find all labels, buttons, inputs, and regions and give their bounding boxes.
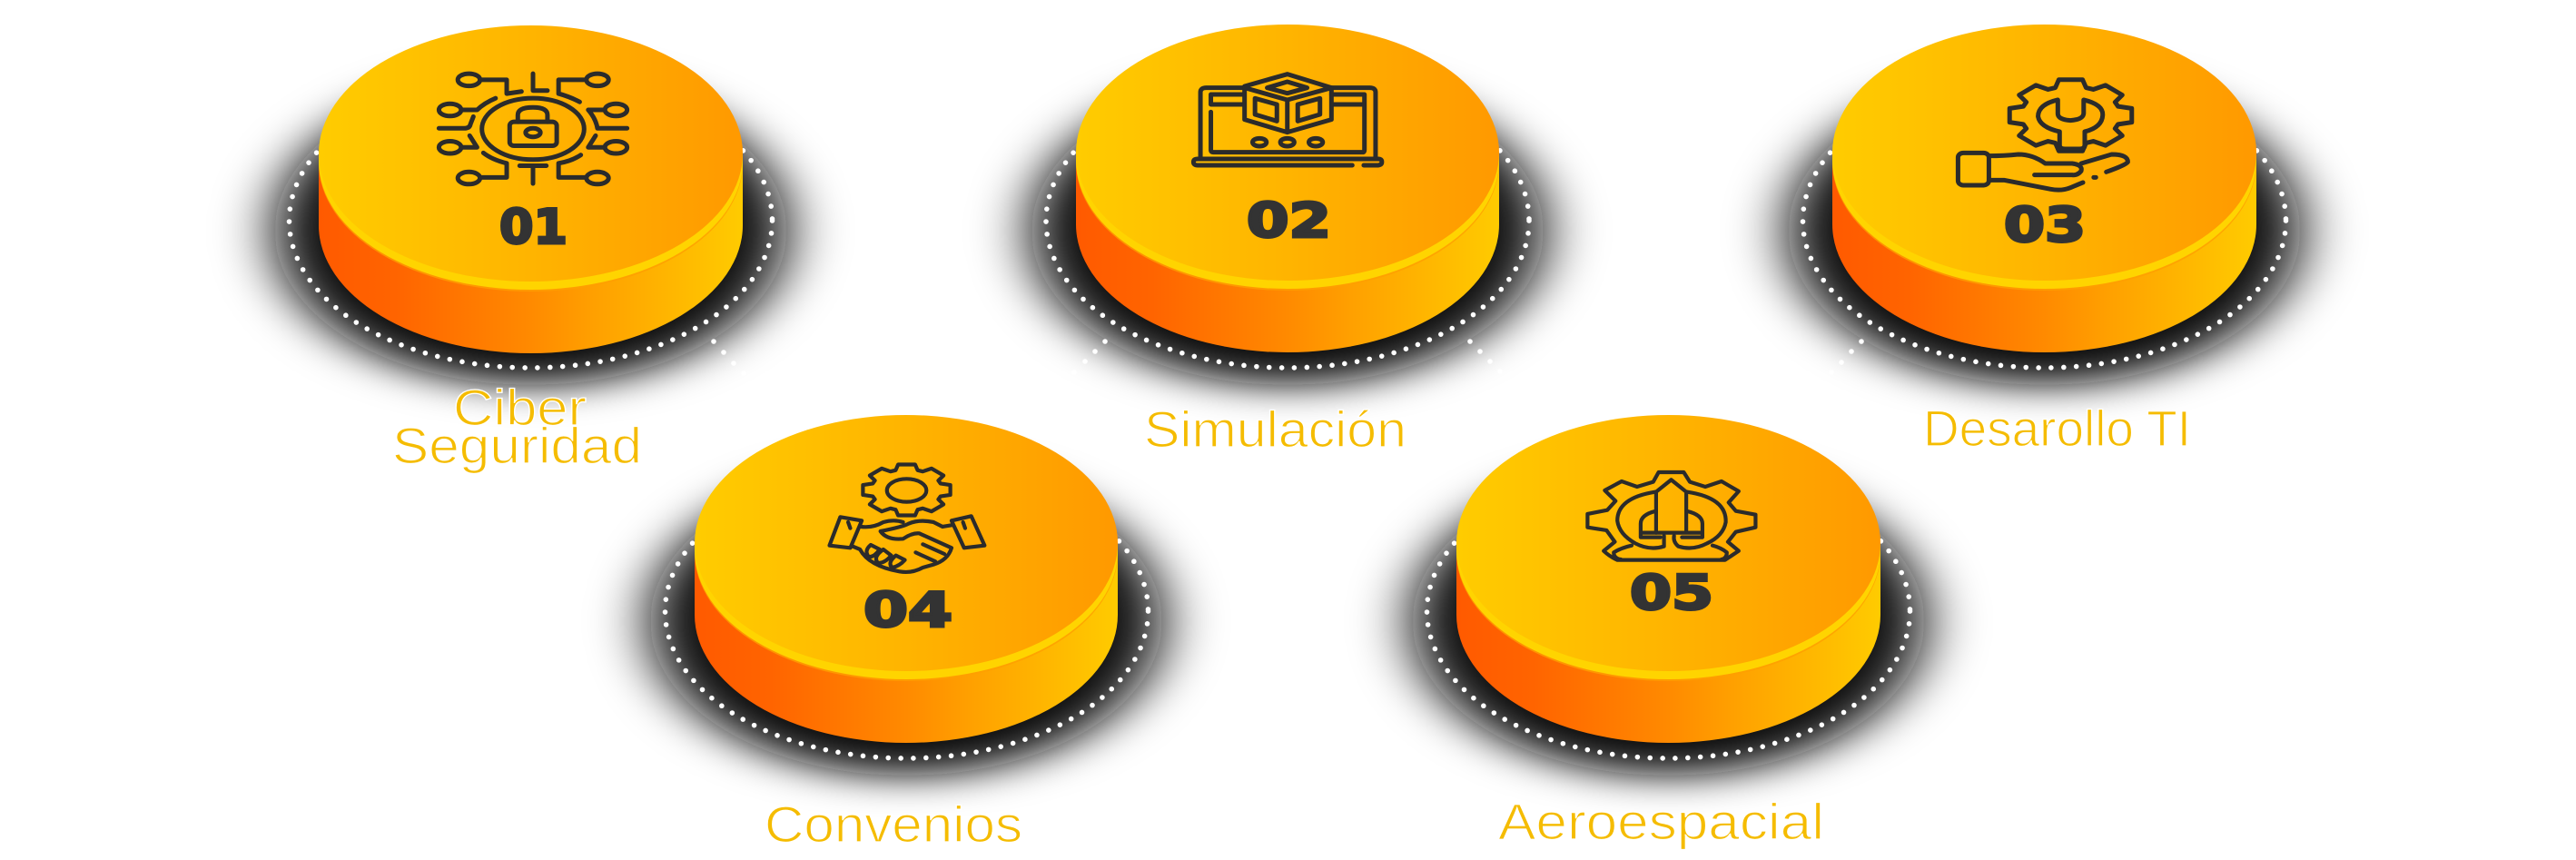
icon: circuit lock	[439, 74, 627, 184]
disk rim 04	[695, 423, 1118, 681]
panel: disk 01 Ciber Seguridad	[274, 25, 786, 385]
label: Desarollo TI: Desarollo TI	[1923, 400, 2191, 457]
disk side 03	[1832, 153, 2256, 352]
disk side 02	[1076, 153, 1499, 352]
number 05: 05	[1630, 566, 1713, 621]
shadow 05	[1413, 467, 1925, 776]
label line: Ciber: Ciber	[453, 379, 587, 436]
disk rim 01	[319, 34, 743, 292]
label: Ciber Seguridad	[392, 379, 642, 474]
disk top 02	[1076, 25, 1499, 281]
extra dots 03	[1829, 339, 1864, 375]
panel: disk 02 Simulación	[1031, 25, 1544, 385]
icon: gear with rocket	[1587, 472, 1755, 560]
number 02: 02	[1247, 193, 1331, 249]
label: Aeroespacial: Aeroespacial	[1498, 793, 1824, 850]
icon: handshake with gear	[830, 465, 984, 572]
disk side 05	[1456, 543, 1880, 743]
dotted ring 05	[1427, 464, 1910, 758]
dotted ring 03	[1803, 74, 2286, 368]
number 04: 04	[864, 583, 952, 638]
disk rim 03	[1832, 33, 2256, 291]
icon: hand with gear and wrench	[1958, 80, 2132, 190]
disk rim 02	[1076, 33, 1499, 291]
shadow 01	[274, 76, 786, 385]
disk top 05	[1456, 415, 1880, 671]
disk top 01	[319, 25, 743, 282]
label: Simulación: Simulación	[1144, 400, 1406, 458]
disk side 04	[695, 543, 1118, 743]
disk top 04	[695, 415, 1118, 671]
panel: disk 03 Desarollo TI	[1789, 25, 2301, 385]
disk top 03	[1832, 25, 2256, 281]
label: Convenios: Convenios	[765, 796, 1022, 853]
number 03: 03	[2004, 198, 2086, 253]
panel: disk 05 Aeroespacial	[1413, 415, 1925, 776]
icon: laptop with cube	[1193, 74, 1382, 165]
extra dots 02	[1071, 339, 1503, 375]
dotted ring 02	[1046, 74, 1529, 368]
disk side 01	[319, 153, 743, 353]
dotted ring 01	[289, 74, 772, 368]
label line: Seguridad: Seguridad	[392, 417, 642, 474]
number 01: 01	[499, 200, 568, 255]
panel: disk 04 Convenios	[650, 415, 1162, 776]
extra dots 01	[711, 339, 746, 376]
dotted ring 04	[665, 464, 1148, 758]
disk rim 05	[1456, 423, 1880, 681]
shadow 03	[1789, 76, 2301, 385]
shadow 04	[650, 467, 1162, 776]
shadow 02	[1031, 76, 1544, 385]
